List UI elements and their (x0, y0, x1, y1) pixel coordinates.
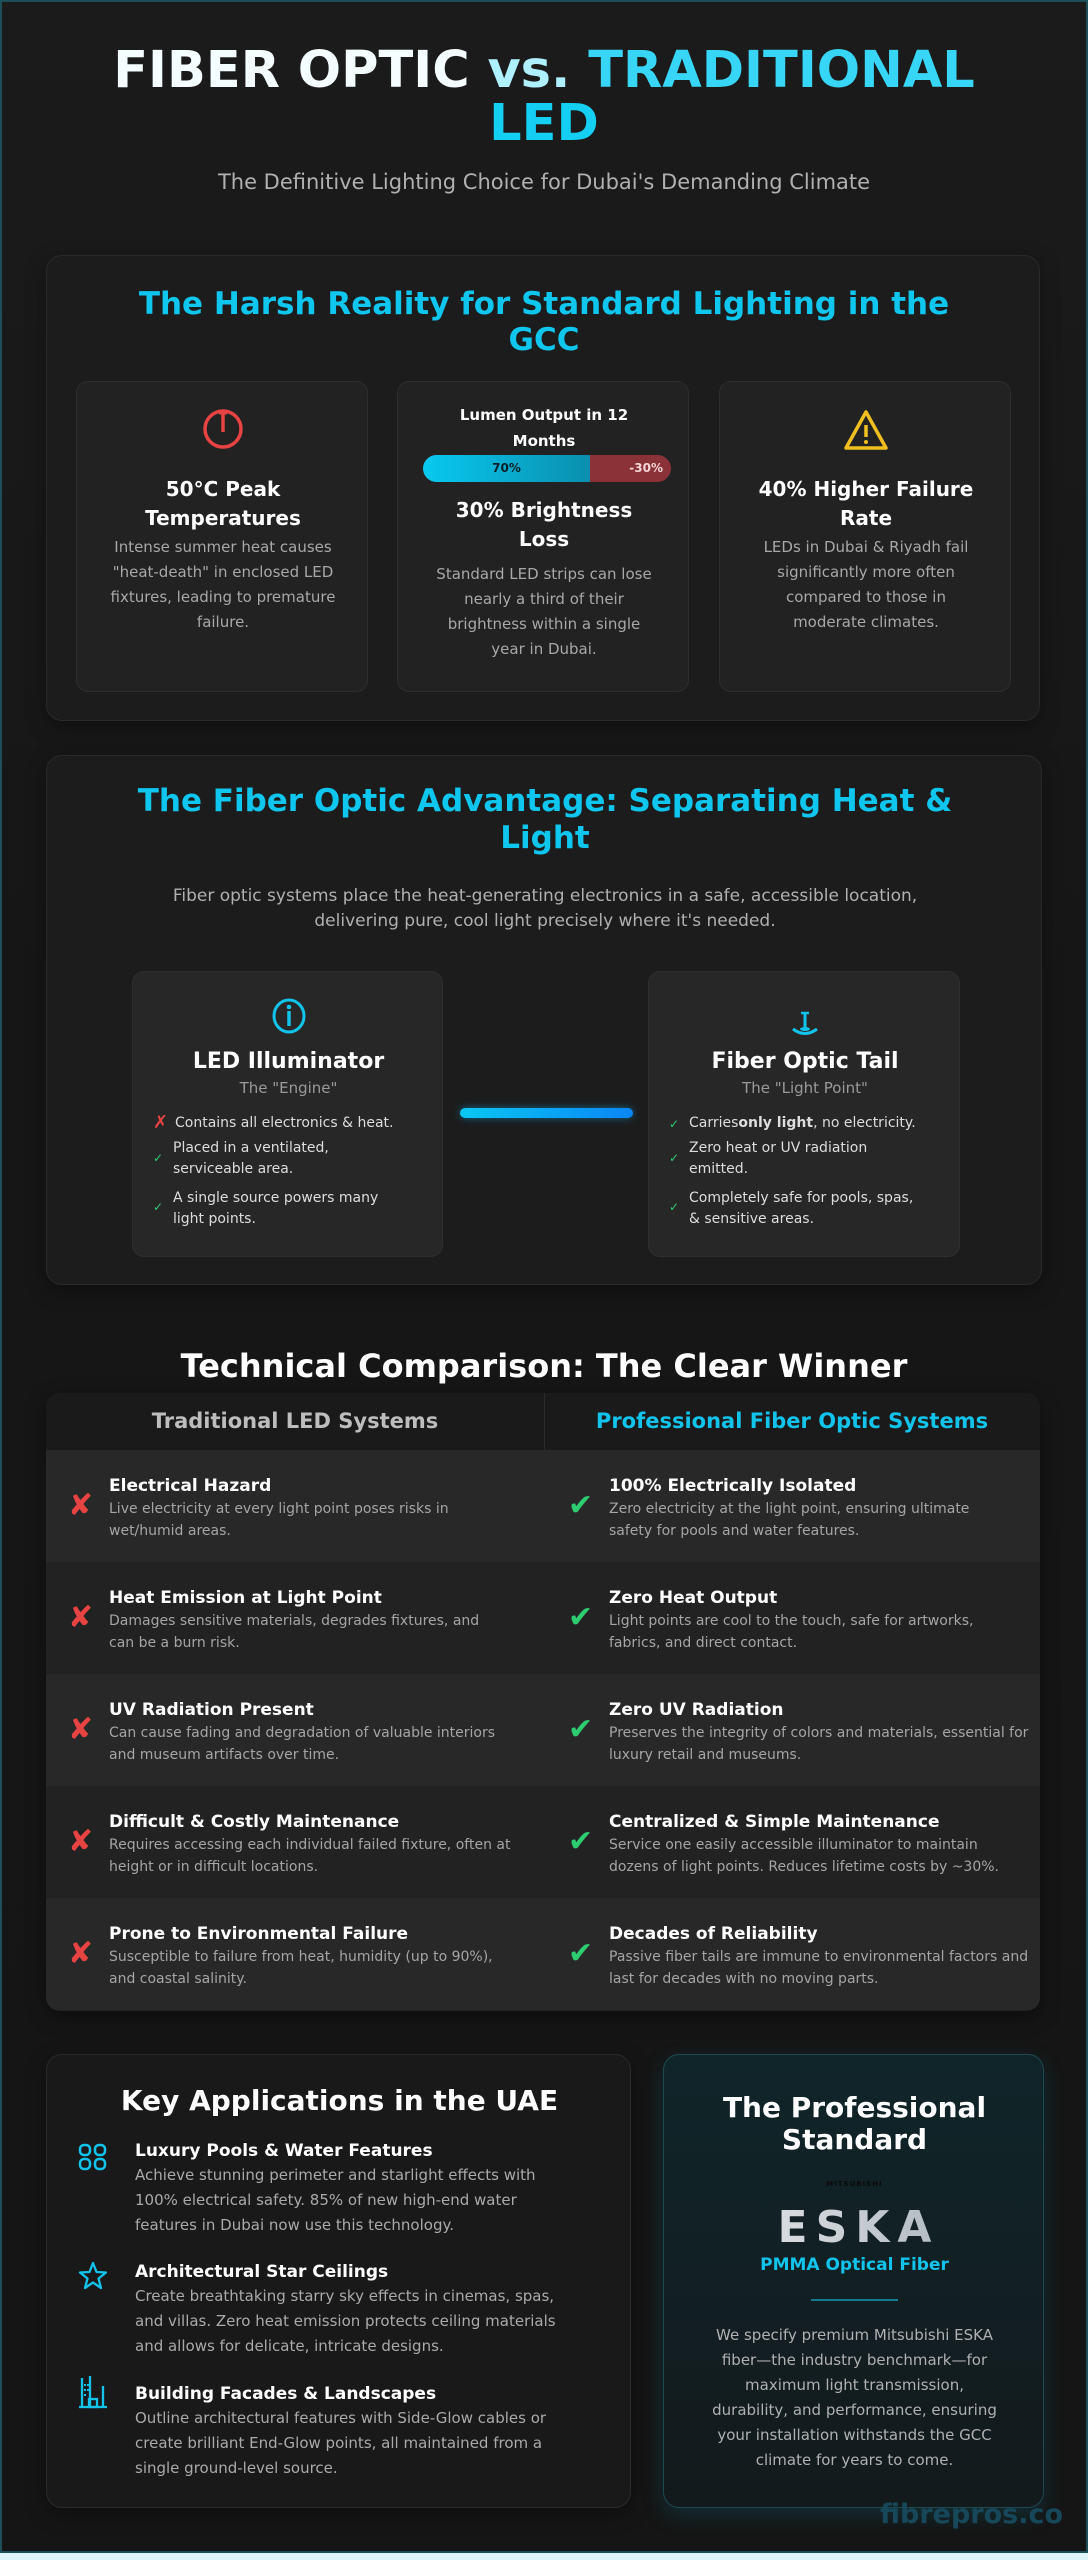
row 2: ✔ (568, 1600, 593, 1635)
text: eska description (712, 2326, 997, 2469)
card subtitle: The "Light Point" (742, 1079, 868, 1097)
row 4: Difficult & Costly Maintenance (109, 1812, 399, 1832)
list: ✓ (669, 1200, 679, 1214)
heading: harsh reality: GCC (509, 322, 579, 358)
panel: fiber optic advantage (46, 755, 1042, 1285)
row 4: Centralized & Simple Maintenance (609, 1812, 940, 1832)
card text: LEDs in Dubai & Riyadh fail significantly more often compared to those in moderate climates. (764, 538, 968, 631)
row 2 (46, 1562, 1040, 1674)
logo: mitsubishi eska (760, 2180, 949, 2275)
card: brightness loss (397, 381, 689, 692)
text: eska description: durability, and performance, ensuring (712, 2401, 997, 2419)
icon: building (79, 2376, 107, 2408)
list (669, 1115, 916, 1227)
arrow: light connector (460, 1108, 633, 1118)
card: fiber optic tail (648, 971, 960, 1257)
card: 50C (76, 381, 368, 692)
heading: technical comparison: Technical Comparison: The Clear Winner (181, 1347, 907, 1385)
item: star ceilings: Architectural Star Ceilings (135, 2262, 388, 2282)
list: Contains all electronics & heat. (175, 1115, 394, 1131)
subtitle: The Definitive Lighting Choice for Dubai's Demanding Climate (218, 170, 870, 194)
item: star ceilings: Create breathtaking starry sky effects in cinemas, spas, (135, 2287, 554, 2305)
item: star ceilings: and villas. Zero heat emission protects ceiling materials (135, 2312, 556, 2330)
bar chart: -30% (629, 461, 663, 475)
panel: key applications (46, 2054, 631, 2508)
list: ✓ (153, 1200, 163, 1214)
heading: professional standard (723, 2091, 986, 2156)
row 1 (46, 1450, 1040, 1562)
row 3: ✘ (68, 1712, 93, 1747)
row 2: ✘ (68, 1600, 93, 1635)
card text: Standard LED strips can lose nearly a third of their brightness within a single year in Dubai. (436, 565, 652, 658)
list: ✗ (153, 1112, 168, 1133)
chart label: Lumen Output in 12 (460, 406, 628, 424)
list: A single source powers many light points. (173, 1190, 378, 1227)
card title: Rate (840, 506, 892, 530)
text: eska description: fiber—the industry benchmark—for (722, 2351, 987, 2369)
item: star ceilings: and allows for delicate, intricate designs. (135, 2337, 444, 2355)
item: facades: single ground-level source. (135, 2459, 338, 2477)
heading: advantage (138, 783, 952, 856)
icon: star (78, 2262, 108, 2290)
row 3: Zero UV Radiation (609, 1700, 783, 1720)
list: Placed in a ventilated, serviceable area. (173, 1140, 329, 1177)
row 1: Electrical Hazard (109, 1476, 271, 1496)
list: & sensitive areas. (689, 1211, 814, 1227)
table header: Traditional LED Systems (152, 1409, 438, 1433)
watermark: fibrepros.co (880, 2499, 1063, 2530)
card title: Temperatures (145, 506, 301, 530)
row 3: UV Radiation Present (109, 1700, 314, 1720)
title (113, 41, 975, 153)
text: eska description: We specify premium Mitsubishi ESKA (716, 2326, 993, 2344)
row 5: Susceptible to failure from heat, humidity (up to 90%), and coastal salinity. (109, 1949, 493, 1987)
item: facades: create brilliant End-Glow points, all maintained from a (135, 2434, 542, 2452)
row 5: Prone to Environmental Failure (109, 1924, 408, 1944)
heading: advantage: Light (500, 820, 590, 856)
row 1: Live electricity at every light point poses risks in wet/humid areas. (109, 1501, 449, 1539)
item: pools: Achieve stunning perimeter and starlight effects with (135, 2166, 536, 2184)
row 1: ✔ (568, 1488, 593, 1523)
card title: Fiber Optic Tail (711, 1049, 899, 1074)
divider line (811, 2299, 898, 2301)
logo: mitsubishi eska: ESKA (778, 2202, 939, 2253)
list: Carriesonly light, no electricity. (689, 1115, 916, 1131)
icon: grid (78, 2144, 106, 2170)
panel: harsh reality (46, 255, 1040, 721)
row 2: Light points are cool to the touch, safe for artworks, fabrics, and direct contact. (609, 1613, 973, 1651)
heading: applications: Key Applications in the UAE (121, 2084, 558, 2117)
list: ✓ (669, 1117, 679, 1131)
item: facades: Building Facades & Landscapes (135, 2384, 436, 2404)
heading: professional standard: Standard (782, 2123, 927, 2156)
intro text (173, 886, 917, 931)
heading: harsh reality: The Harsh Reality for Standard Lighting in the (139, 286, 949, 322)
card title: 40% Higher Failure (759, 477, 973, 501)
row 3 (46, 1674, 1040, 1786)
list: Zero heat or UV radiation emitted. (689, 1140, 867, 1177)
list: Completely safe for pools, spas, (689, 1190, 913, 1206)
item: facades (79, 2376, 546, 2477)
item: pools: features in Dubai now use this technology. (135, 2216, 454, 2234)
row 4: ✘ (68, 1824, 93, 1859)
text: eska description: climate for years to come. (756, 2451, 953, 2469)
card subtitle: The "Engine" (240, 1079, 337, 1097)
card: failure rate (719, 381, 1011, 692)
row 2: Zero Heat Output (609, 1588, 777, 1608)
row 1: ✘ (68, 1488, 93, 1523)
item: pools: Luxury Pools & Water Features (135, 2141, 433, 2161)
card title: LED Illuminator (193, 1049, 384, 1074)
row 1: 100% Electrically Isolated (609, 1476, 856, 1496)
card text: Intense summer heat causes "heat-death" in enclosed LED fixtures, leading to premature failure. (111, 538, 335, 631)
text: eska description: your installation withstands the GCC (717, 2426, 992, 2444)
row 2: Damages sensitive materials, degrades fixtures, and can be a burn risk. (109, 1613, 479, 1651)
heading: advantage: The Fiber Optic Advantage: Separating Heat & (138, 783, 952, 819)
heading: professional standard: The Professional (723, 2091, 986, 2124)
heading: harsh reality (139, 286, 949, 358)
title: FIBER OPTIC vs. TRADITIONAL (113, 41, 975, 100)
intro text: Fiber optic systems place the heat-generating electronics in a safe, accessible location, (173, 886, 917, 906)
row 4: Requires accessing each individual failed fixture, often at height or in difficult locations. (109, 1837, 510, 1875)
bar chart: 70% (492, 461, 521, 475)
chart label (460, 406, 628, 450)
card title (456, 498, 632, 551)
card title: 50°C Peak (166, 477, 280, 501)
card title (759, 477, 973, 530)
row 4: ✔ (568, 1824, 593, 1859)
list: ✓ (153, 1151, 163, 1165)
title: LED (489, 94, 599, 153)
row 5: Decades of Reliability (609, 1924, 818, 1944)
row 3: Preserves the integrity of colors and materials, essential for luxury retail and museums. (609, 1725, 1028, 1763)
card: LED illuminator (132, 971, 443, 1257)
card title: 30% Brightness (456, 498, 632, 522)
item: pools: 100% electrical safety. 85% of new high-end water (135, 2191, 517, 2209)
row 5: ✘ (68, 1936, 93, 1971)
row 5: Passive fiber tails are immune to environmental factors and last for decades with no moving parts. (609, 1949, 1028, 1987)
item: star ceilings (78, 2262, 556, 2355)
icon: warning (844, 410, 888, 450)
item: pools (78, 2141, 536, 2234)
table header: Professional Fiber Optic Systems (596, 1409, 988, 1433)
text: eska description: maximum light transmission, (745, 2376, 964, 2394)
list (153, 1112, 394, 1227)
row 3: Can cause fading and degradation of valuable interiors and museum artifacts over time. (109, 1725, 495, 1763)
icon: thermometer (203, 409, 243, 449)
row 1: Zero electricity at the light point, ensuring ultimate safety for pools and water features. (609, 1501, 969, 1539)
chart label: Months (513, 432, 575, 450)
bar chart (423, 455, 671, 482)
comparison table (46, 1393, 1040, 2011)
list: ✓ (669, 1151, 679, 1165)
logo: mitsubishi eska: PMMA Optical Fiber (760, 2255, 949, 2275)
row 5: ✔ (568, 1936, 593, 1971)
icon: fiber tail (792, 1012, 818, 1035)
row 4: Service one easily accessible illuminator to maintain dozens of light points. Reduces lifetime costs by ~30%. (609, 1837, 999, 1875)
row 3: ✔ (568, 1712, 593, 1747)
panel: professional standard (663, 2054, 1044, 2508)
intro text: delivering pure, cool light precisely where it's needed. (314, 911, 776, 931)
card title (145, 477, 301, 530)
row 4 (46, 1786, 1040, 1898)
item: facades: Outline architectural features with Side-Glow cables or (135, 2409, 546, 2427)
icon: illuminator (272, 998, 306, 1034)
table header (46, 1393, 1040, 1450)
row 2: Heat Emission at Light Point (109, 1588, 382, 1608)
row 5 (46, 1898, 1040, 2010)
card title: Loss (519, 527, 569, 551)
logo: mitsubishi eska: MITSUBISHI (826, 2180, 883, 2188)
